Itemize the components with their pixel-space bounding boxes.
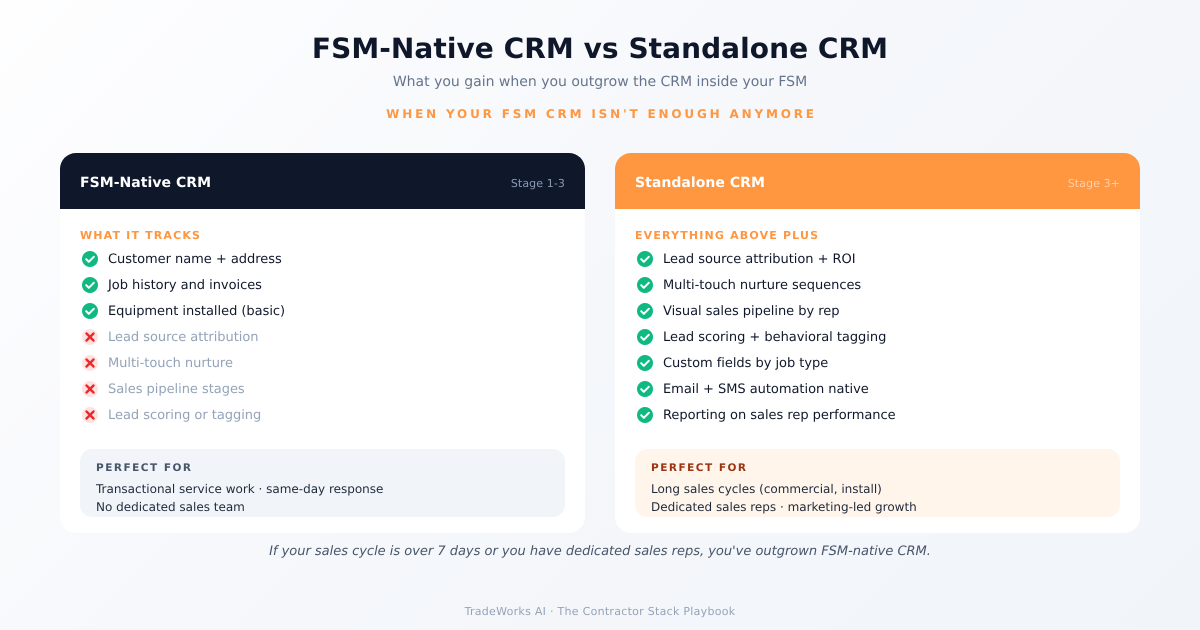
panel header: FSM-Native CRM — [60, 153, 585, 209]
panel header: Standalone CRM — [615, 153, 1140, 209]
item: nurture: Multi-touch nurture sequences — [663, 278, 861, 293]
item: nurture missing: Multi-touch nurture — [108, 356, 233, 371]
subtitle: What you gain when you outgrow the CRM inside your FSM — [393, 74, 807, 90]
item: scoring: Lead scoring + behavioral tagging — [663, 330, 886, 345]
callout: perfect for: Transactional service work · same-day response — [96, 482, 383, 496]
callout: perfect for: PERFECT FOR — [96, 462, 193, 474]
callout: perfect for — [80, 449, 565, 517]
item: reporting: Reporting on sales rep performance — [663, 408, 896, 423]
footer: TradeWorks AI · The Contractor Stack Playbook — [465, 605, 735, 618]
item: equipment: Equipment installed (basic) — [108, 304, 285, 319]
panel: Standalone CRM — [615, 153, 1140, 533]
panel header: FSM-Native CRM: Stage 1-3 — [511, 177, 565, 190]
callout: perfect for: PERFECT FOR — [651, 462, 748, 474]
panel: FSM-Native CRM — [60, 153, 585, 533]
item: job history: Job history and invoices — [108, 278, 262, 293]
item: customer name: Customer name + address — [108, 252, 282, 267]
tagline: WHEN YOUR FSM CRM ISN'T ENOUGH ANYMORE — [386, 106, 817, 120]
panel header: FSM-Native CRM: FSM-Native CRM — [80, 175, 211, 191]
item: scoring missing: Lead scoring or tagging — [108, 408, 261, 423]
item: pipeline: Visual sales pipeline by rep — [663, 304, 839, 319]
item: pipeline missing: Sales pipeline stages — [108, 382, 245, 397]
callout: perfect for: No dedicated sales team — [96, 500, 245, 514]
item: lead source missing: Lead source attribution — [108, 330, 258, 345]
section label: EVERYTHING ABOVE PLUS — [635, 228, 819, 242]
item: lead source: Lead source attribution + ROI — [663, 252, 856, 267]
callout: perfect for: Dedicated sales reps · marketing-led growth — [651, 500, 917, 514]
callout: perfect for: Long sales cycles (commercial, install) — [651, 482, 882, 496]
panel header: Standalone CRM: Standalone CRM — [635, 175, 765, 191]
item: custom fields: Custom fields by job type — [663, 356, 828, 371]
takeaway note: If your sales cycle is over 7 days or you have dedicated sales reps, you've outgrown FSM-native CRM. — [269, 544, 931, 559]
section label: WHAT IT TRACKS — [80, 228, 201, 242]
panel header: Standalone CRM: Stage 3+ — [1068, 177, 1120, 190]
title: FSM-Native CRM vs Standalone CRM — [312, 32, 888, 64]
item: automation: Email + SMS automation native — [663, 382, 869, 397]
callout: perfect for — [635, 449, 1120, 517]
